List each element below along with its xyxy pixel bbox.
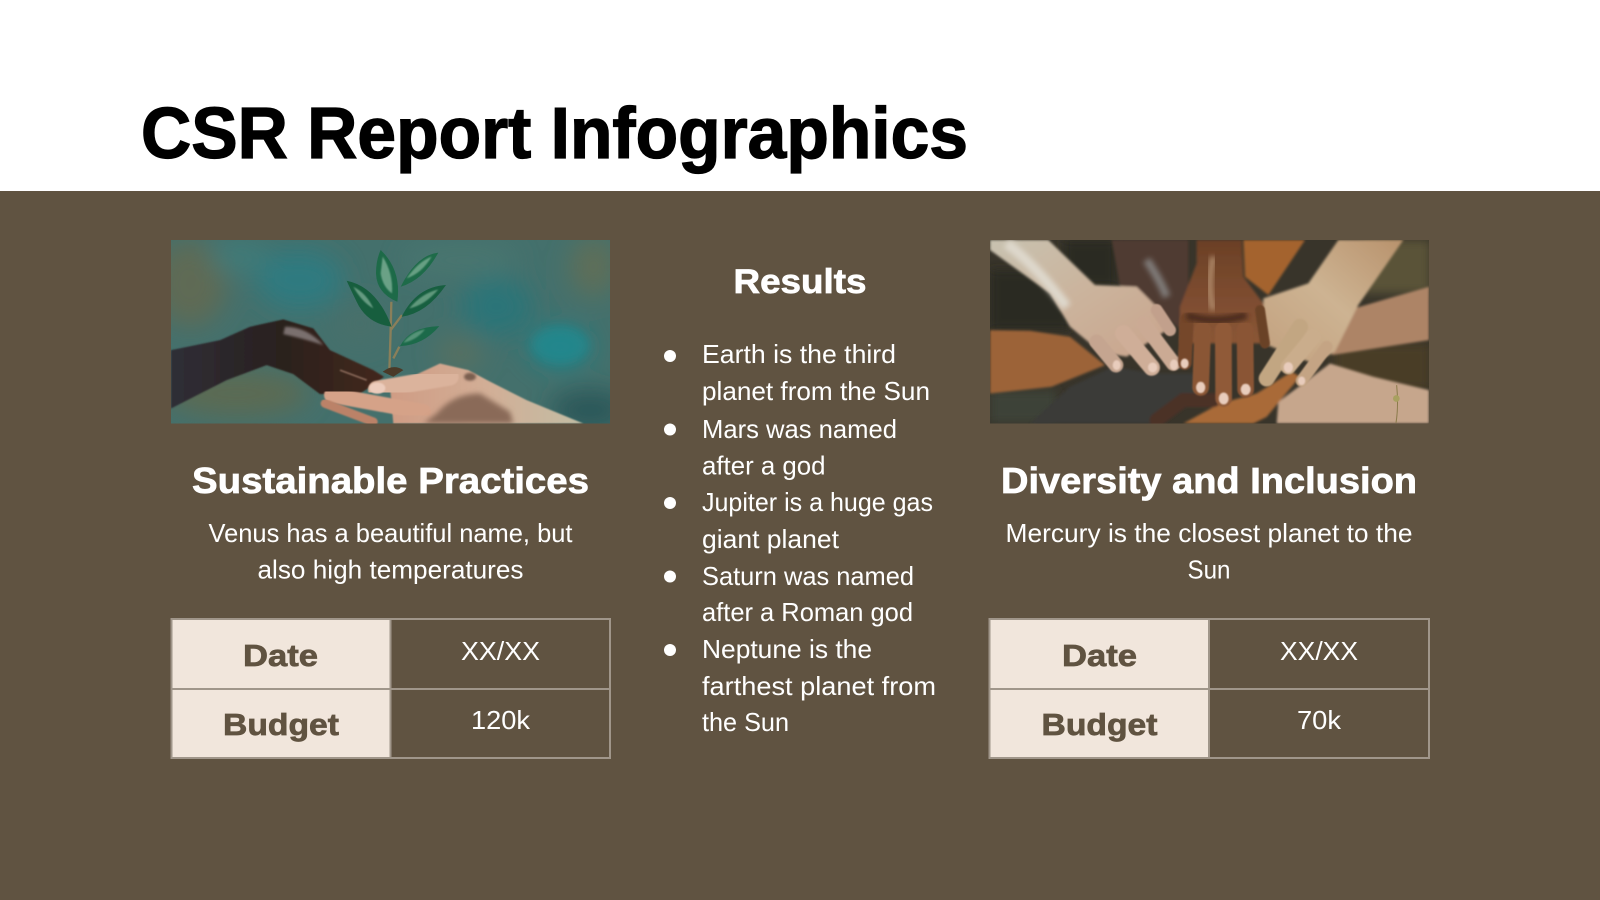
panel: sustainable practices [153,237,630,758]
description: also high temperatures [258,554,524,584]
bullet list: after a god [702,450,826,480]
top right pale hand [1263,240,1403,363]
arms behind [1112,240,1188,337]
fingers of pale left hand [1097,310,1327,398]
bullet list: giant planet [702,524,840,554]
table [989,619,1429,758]
bullet list: Jupiter is a huge gas [702,487,933,517]
title: CSR Report Infographics [141,94,968,174]
heading: Diversity and Inclusion [1001,460,1417,501]
table: Date [1062,638,1137,673]
heading: Results [734,263,866,301]
image: stacked hands [990,240,1429,424]
table: XX/XX [1280,636,1358,666]
seedling [389,302,402,372]
bullet list: Mars was named [702,414,897,444]
description: Venus has a beautiful name, but [208,518,573,548]
description [208,518,573,584]
centre brown hand [1180,240,1263,343]
fingers of brown hand [1185,320,1187,363]
bracelet [1396,385,1398,423]
fingernails [1113,358,1305,404]
panel: diversity and inclusion [989,240,1430,758]
description: Mercury is the closest planet to the [1006,518,1412,548]
background band [0,191,1600,900]
table: Budget [1042,707,1158,742]
table: 70k [1297,705,1342,735]
table [171,619,610,758]
dark hand [171,319,384,408]
heading: Sustainable Practices [192,460,589,501]
bullet list: Saturn was named [702,561,914,591]
table: 120k [471,705,531,735]
bullet list: farthest planet from [702,671,936,701]
bullet list: planet from the Sun [702,376,930,406]
fingers of pale right hand [1267,327,1300,378]
image: hands holding a seedling [171,240,610,424]
table: XX/XX [461,636,540,666]
light hand [390,363,583,424]
description [1006,518,1412,584]
bullet list: after a Roman god [702,597,913,627]
table: Date [243,638,318,673]
table: Budget [223,707,339,742]
bullet list: Earth is the third [702,339,896,369]
left pale hand [990,240,1167,357]
bullet list: the Sun [702,707,789,737]
description: Sun [1188,554,1230,584]
bullet list: Neptune is the [702,634,872,664]
bullet list [664,339,936,737]
panel: results [664,263,936,737]
